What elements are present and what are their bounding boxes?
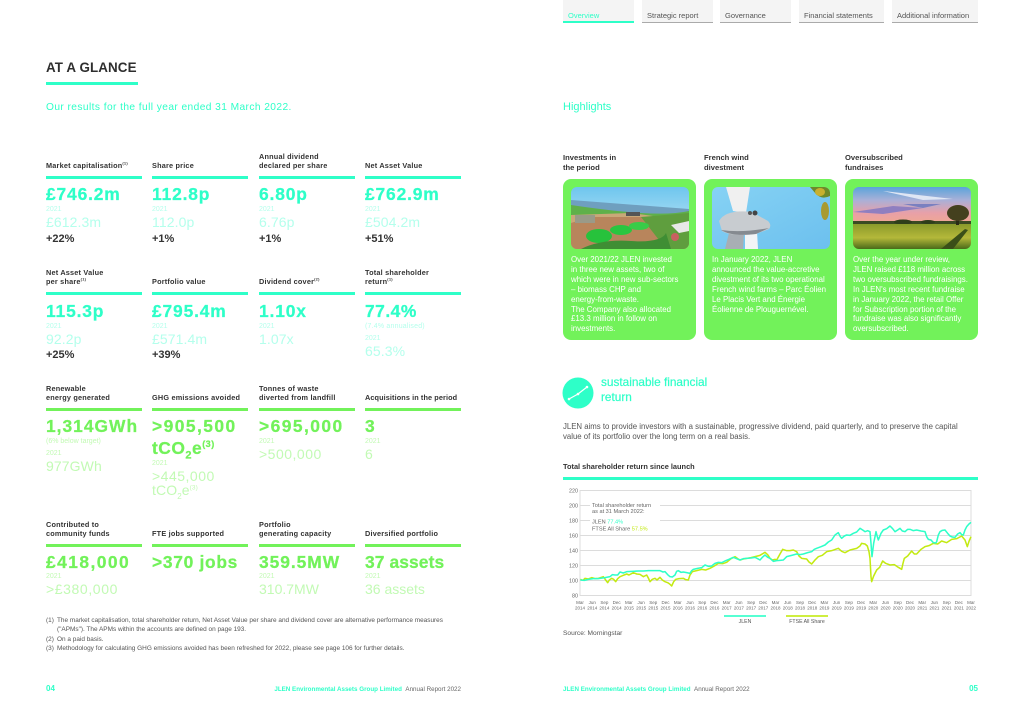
section heading: sustainable financial return: return xyxy=(601,390,632,404)
metric: market capitalisation: Market capitalisation(1) xyxy=(46,161,128,170)
metric: share price: 112.8p xyxy=(152,184,210,204)
metric: total shareholder return: 77.4% xyxy=(365,301,417,321)
card text: energy-from-waste. xyxy=(571,295,639,304)
tab: strategic report xyxy=(642,0,713,23)
footnotes xyxy=(46,616,443,652)
metric: net asset value per share: per share(1) xyxy=(46,277,86,286)
metric: GHG emissions avoided: tCO2e(3) xyxy=(152,438,215,461)
metric: acquisitions: 6 xyxy=(365,446,373,462)
x axis labels: Sep xyxy=(698,600,707,605)
x axis labels: Jun xyxy=(589,600,596,605)
metric: tonnes of waste diverted: >695,000 xyxy=(259,416,344,436)
metric: share price: +1% xyxy=(152,232,174,244)
metric: net asset value: +51% xyxy=(365,232,393,244)
x axis labels: 2017 xyxy=(746,606,757,610)
metric: community funds: £418,000 xyxy=(46,552,130,572)
metric: GHG emissions avoided: tCO2e(3) xyxy=(152,482,198,501)
x axis labels: 2016 xyxy=(685,606,696,610)
metric: diversified portfolio: Diversified portfolio xyxy=(365,529,438,538)
x axis labels: 2020 xyxy=(905,606,916,610)
metric: tonnes of waste diverted: >500,000 xyxy=(259,446,322,462)
metric: share price: 112.0p xyxy=(152,214,194,230)
metric: renewable energy generated: (6% below target) xyxy=(46,438,101,445)
panel: fundraises card xyxy=(845,179,978,340)
metric: portfolio value xyxy=(152,277,248,360)
x axis labels: 2015 xyxy=(660,606,671,610)
metric: total shareholder return: (7.4% annualised) xyxy=(365,323,425,330)
chart heading: Total shareholder return since launch xyxy=(563,462,695,471)
x axis labels: Mar xyxy=(674,600,682,605)
tab: additional information: Additional information xyxy=(897,11,969,20)
x axis labels: Dec xyxy=(857,600,866,605)
highlight heading: French wind: French wind xyxy=(704,153,749,162)
x axis labels: 2017 xyxy=(734,606,744,610)
metric: diversified portfolio: 2021 xyxy=(365,573,381,580)
metric: market capitalisation: £612.3m xyxy=(46,214,101,230)
card text: Over the year under review, xyxy=(853,255,950,264)
navigation tabs xyxy=(563,0,978,23)
metric: tonnes of waste diverted: diverted from landfill xyxy=(259,393,336,402)
x axis labels xyxy=(575,600,977,610)
x axis labels: Dec xyxy=(759,600,768,605)
metric: net asset value per share: 115.3p xyxy=(46,301,104,321)
metric: renewable energy generated: 977GWh xyxy=(46,458,102,474)
metric: GHG emissions avoided: GHG emissions avoided xyxy=(152,393,240,402)
photo: sunset field xyxy=(853,187,971,249)
footnotes: The market capitalisation, total shareholder return, Net Asset Value per share and dividend cover are alternative performance measures xyxy=(57,616,443,624)
x axis labels: Dec xyxy=(613,600,621,605)
x axis labels: Jun xyxy=(637,600,645,605)
metric: total shareholder return: 65.3% xyxy=(365,343,405,359)
x axis labels: Sep xyxy=(747,600,756,605)
x axis labels: 2019 xyxy=(856,606,867,610)
metric: diversified portfolio: 36 assets xyxy=(365,581,425,597)
metric: renewable energy generated: energy generated xyxy=(46,393,110,402)
metric: net asset value per share: 92.2p xyxy=(46,331,82,347)
x axis labels: 2021 xyxy=(929,606,940,610)
chart annotation: Total shareholder return xyxy=(592,503,651,509)
chart heading rule xyxy=(563,477,978,480)
card text: for Subscription portion of the xyxy=(853,305,956,314)
x axis labels: Dec xyxy=(808,600,817,605)
metric: market capitalisation xyxy=(46,161,142,244)
subtitle: Our results for the full year ended 31 March 2022. xyxy=(46,102,292,112)
x axis labels: 2016 xyxy=(709,606,720,610)
footnotes: (3) xyxy=(46,645,54,652)
metric: market capitalisation: +22% xyxy=(46,232,74,244)
highlight heading: fundraises xyxy=(845,153,903,172)
x axis labels: Sep xyxy=(845,600,853,605)
legend: FTSE All Share: FTSE All Share xyxy=(789,619,825,625)
y axis labels: 160 xyxy=(569,534,578,540)
metric: tonnes of waste diverted: Tonnes of waste xyxy=(259,384,319,393)
metric: FTE jobs: >370 jobs xyxy=(152,552,238,572)
footnotes: Methodology for calculating GHG emissions avoided has been refreshed for 2022, please see page 106 for further details. xyxy=(57,645,404,652)
y axis labels: 100 xyxy=(569,578,578,584)
metric: renewable energy generated: 2021 xyxy=(46,450,62,457)
x axis labels: Jun xyxy=(686,600,694,605)
metric: annual dividend: declared per share xyxy=(259,161,328,170)
x axis labels: Sep xyxy=(894,600,902,605)
tab: strategic report: Strategic report xyxy=(647,11,698,20)
x axis labels: 2021 xyxy=(954,606,964,610)
metric: share price xyxy=(152,161,248,244)
highlight heading: investments xyxy=(563,153,616,172)
card text: £13.3 million in follow on xyxy=(571,314,657,323)
metric: FTE jobs: FTE jobs supported xyxy=(152,529,224,538)
metric: annual dividend: 6.80p xyxy=(259,184,308,204)
metric: total shareholder return xyxy=(365,268,461,359)
x axis labels: 2022 xyxy=(966,606,977,610)
tab: financial statements xyxy=(799,0,884,23)
metric: total shareholder return: Total shareholder xyxy=(365,268,429,277)
x axis labels: 2017 xyxy=(758,606,769,610)
x axis labels: Sep xyxy=(649,600,658,605)
card text: In JLEN's most recent fundraise xyxy=(853,285,965,294)
footer right page number: 05 xyxy=(969,684,978,693)
highlights heading: Highlights xyxy=(563,100,611,112)
card text: Over 2021/22 JLEN invested xyxy=(571,255,672,264)
title: AT A GLANCE xyxy=(46,60,137,74)
metric: total shareholder return: return(1) xyxy=(365,277,393,286)
y axis labels xyxy=(569,488,578,600)
card text xyxy=(712,255,826,314)
metric: net asset value per share: Net Asset Value xyxy=(46,268,103,277)
metric: annual dividend: 2021 xyxy=(259,206,275,213)
footnotes: (2) xyxy=(46,636,54,642)
metric: share price: Share price xyxy=(152,161,194,170)
photo: wind turbine xyxy=(712,187,830,249)
x axis labels: 2021 xyxy=(917,606,928,610)
tab: governance xyxy=(720,0,791,23)
metric: net asset value: 2021 xyxy=(365,206,381,213)
highlight heading: fundraises: fundraises xyxy=(845,163,883,172)
chart annotation: JLEN 77.4% xyxy=(592,520,623,526)
tab: financial statements: Financial statements xyxy=(804,11,873,20)
card text: divestment of its two operational xyxy=(712,275,825,284)
metric: community funds xyxy=(46,520,142,597)
chart annotation: FTSE All Share 57.5% xyxy=(592,526,648,532)
metric: market capitalisation: 2021 xyxy=(46,206,62,213)
metric: generating capacity: 359.5MW xyxy=(259,552,340,572)
x axis labels: Mar xyxy=(723,600,731,605)
metric: dividend cover: 1.07x xyxy=(259,331,294,347)
metric: renewable energy generated xyxy=(46,384,142,474)
metric: net asset value xyxy=(365,161,461,244)
x axis labels: 2020 xyxy=(880,606,891,610)
footer left report name: JLEN Environmental Assets Group Limited Annual Report 2022 xyxy=(274,686,461,692)
y axis labels: 220 xyxy=(569,488,578,494)
section heading: sustainable financial return: sustainable financial xyxy=(601,375,707,389)
metric: tonnes of waste diverted xyxy=(259,384,355,462)
x axis labels: 2015 xyxy=(648,606,659,610)
card text: French wind farms – Parc Éolien xyxy=(712,285,826,294)
series: FTSE All Share xyxy=(580,522,971,586)
card text: JLEN raised £118 million across xyxy=(853,265,965,274)
x axis labels: 2014 xyxy=(612,606,622,610)
x axis labels: 2015 xyxy=(636,606,647,610)
metric: total shareholder return: 2021 xyxy=(365,335,381,342)
metric: community funds: community funds xyxy=(46,529,110,538)
paragraph: value of its portfolio over the long term on a real basis. xyxy=(563,432,750,441)
highlight heading: French wind: divestment xyxy=(704,163,744,172)
metric: share price: 2021 xyxy=(152,206,168,213)
metric: annual dividend: 6.76p xyxy=(259,214,295,230)
metric: generating capacity: Portfolio xyxy=(259,520,291,529)
metric: net asset value per share xyxy=(46,268,142,360)
legend: JLEN xyxy=(724,615,766,625)
panel: French wind card xyxy=(704,179,837,340)
photo: biomass plant xyxy=(571,187,689,249)
footnotes: On a paid basis. xyxy=(57,636,104,642)
card text: Éolienne de Plouguernével. xyxy=(712,305,809,314)
metric: dividend cover xyxy=(259,277,355,347)
metric: generating capacity: 310.7MW xyxy=(259,581,319,597)
x axis labels: 2021 xyxy=(942,606,952,610)
metric: acquisitions: Acquisitions in the period xyxy=(365,393,457,402)
tab: overview xyxy=(563,0,634,23)
metric: GHG emissions avoided: >905,500 xyxy=(152,416,237,436)
metric: acquisitions: 3 xyxy=(365,416,376,436)
metric: net asset value: £504.2m xyxy=(365,214,420,230)
footnotes: (1) xyxy=(46,616,54,624)
card text: two oversubscribed fundraisings. xyxy=(853,275,968,284)
metric: dividend cover: 1.10x xyxy=(259,301,307,321)
x axis labels: Dec xyxy=(906,600,915,605)
x axis labels: Dec xyxy=(955,600,964,605)
card text: The Company also allocated xyxy=(571,305,671,314)
metric: generating capacity: generating capacity xyxy=(259,529,331,538)
x axis labels: 2014 xyxy=(587,606,598,610)
card text: In January 2022, JLEN xyxy=(712,255,792,264)
x axis labels: Mar xyxy=(869,600,878,605)
metric: acquisitions xyxy=(365,393,461,462)
x axis labels: 2015 xyxy=(624,606,634,610)
highlight heading: French wind xyxy=(704,153,749,172)
x axis labels: Jun xyxy=(882,600,890,605)
x axis labels: Jun xyxy=(833,600,841,605)
x axis labels: Sep xyxy=(600,600,609,605)
x axis labels: 2018 xyxy=(795,606,806,610)
highlight heading: investments: Investments in xyxy=(563,153,616,162)
chart annotation xyxy=(592,503,651,532)
legend: JLEN: JLEN xyxy=(739,619,752,625)
x axis labels: Jun xyxy=(784,600,792,605)
x axis labels: Dec xyxy=(710,600,719,605)
x axis labels: Sep xyxy=(796,600,804,605)
metric: acquisitions: 2021 xyxy=(365,438,381,445)
card text: in three new assets, two of xyxy=(571,265,664,274)
metric: net asset value per share: 2021 xyxy=(46,323,62,330)
chart annotation: as at 31 March 2022: xyxy=(592,509,645,515)
y axis labels: 200 xyxy=(569,504,578,510)
metric: net asset value: Net Asset Value xyxy=(365,161,422,170)
x axis labels: Jun xyxy=(735,600,743,605)
y axis labels: 120 xyxy=(569,564,578,570)
x axis labels: 2018 xyxy=(807,606,818,610)
tab: additional information xyxy=(892,0,978,23)
metric: net asset value per share: +25% xyxy=(46,348,74,360)
x axis labels: 2018 xyxy=(783,606,793,610)
x axis labels: Mar xyxy=(625,600,633,605)
metric: annual dividend xyxy=(259,152,355,244)
metric: portfolio value: Portfolio value xyxy=(152,277,206,286)
metric: dividend cover: Dividend cover(2) xyxy=(259,277,320,286)
metric: renewable energy generated: Renewable xyxy=(46,384,86,393)
title underline xyxy=(46,82,138,85)
card text: which were in new sub-sectors xyxy=(571,275,678,284)
card text: – biomass CHP and xyxy=(571,285,641,294)
x axis labels: Mar xyxy=(772,600,780,605)
metric: market capitalisation: £746.2m xyxy=(46,184,121,204)
card text: fundraise was also significantly xyxy=(853,314,961,323)
x axis labels: Sep xyxy=(943,600,951,605)
card text: in January 2022, the retail Offer xyxy=(853,295,963,304)
panel: investments card xyxy=(563,179,696,340)
x axis labels: 2019 xyxy=(819,606,830,610)
metric: portfolio value: £795.4m xyxy=(152,301,227,321)
metric: tonnes of waste diverted: 2021 xyxy=(259,438,275,445)
y axis labels: 180 xyxy=(569,518,578,524)
metric: annual dividend: +1% xyxy=(259,232,281,244)
card text xyxy=(571,255,678,333)
legend: FTSE All Share xyxy=(786,615,828,625)
paragraph: JLEN aims to provide investors with a sustainable, progressive dividend, paid quarterly, and to preserve the capital xyxy=(563,422,958,431)
metric: FTE jobs xyxy=(152,529,248,572)
metric: dividend cover: 2021 xyxy=(259,323,275,330)
footer right report name: JLEN Environmental Assets Group Limited Annual Report 2022 xyxy=(563,686,750,692)
x axis labels: Mar xyxy=(918,600,927,605)
metric: generating capacity: 2021 xyxy=(259,573,275,580)
metric: portfolio value: 2021 xyxy=(152,323,168,330)
footnotes: ("APMs"). The APMs within the accounts are defined on page 193. xyxy=(57,626,246,632)
highlight heading: fundraises: Oversubscribed xyxy=(845,153,903,162)
icon: sustainable return circle xyxy=(562,378,594,408)
line chart: total shareholder return xyxy=(569,488,977,625)
x axis labels: 2016 xyxy=(697,606,708,610)
tab: overview: Overview xyxy=(568,11,599,20)
tab: governance: Governance xyxy=(725,11,766,20)
y axis labels: 80 xyxy=(572,594,578,600)
x axis labels: 2019 xyxy=(844,606,854,610)
metric: community funds: Contributed to xyxy=(46,520,99,529)
x axis labels: 2017 xyxy=(722,606,732,610)
card text: announced the value-accretive xyxy=(712,265,819,274)
footer left page number: 04 xyxy=(46,684,55,693)
x axis labels: Mar xyxy=(576,600,584,605)
metric: portfolio value: £571.4m xyxy=(152,331,207,347)
x axis labels: Dec xyxy=(661,600,670,605)
x axis labels: Mar xyxy=(821,600,829,605)
x axis labels: 2019 xyxy=(832,606,842,610)
highlight heading: investments: the period xyxy=(563,163,600,172)
x axis labels: 2016 xyxy=(673,606,683,610)
y axis labels: 140 xyxy=(569,548,578,554)
source note: Source: Morningstar xyxy=(563,630,622,636)
x axis labels: 2020 xyxy=(868,606,879,610)
metric: renewable energy generated: 1,314GWh xyxy=(46,416,138,436)
metric: community funds: 2021 xyxy=(46,573,62,580)
x axis labels: 2018 xyxy=(770,606,781,610)
metric: GHG emissions avoided xyxy=(152,393,248,501)
x axis labels: 2014 xyxy=(599,606,610,610)
section heading: sustainable financial return xyxy=(601,375,707,404)
card text: investments. xyxy=(571,324,615,333)
metric: generating capacity xyxy=(259,520,355,597)
x axis labels: Jun xyxy=(931,600,939,605)
metric: GHG emissions avoided: >445,000 xyxy=(152,468,215,484)
metric: diversified portfolio: 37 assets xyxy=(365,552,444,572)
metric: net asset value: £762.9m xyxy=(365,184,440,204)
metric: community funds: >£380,000 xyxy=(46,581,118,597)
card text: oversubscribed. xyxy=(853,324,909,333)
card text: Le Placis Vert and Énergie xyxy=(712,295,805,304)
series: JLEN xyxy=(580,522,971,580)
x axis labels: Mar xyxy=(967,600,975,605)
metric: portfolio value: +39% xyxy=(152,348,180,360)
metric: diversified portfolio xyxy=(365,529,461,597)
metric: annual dividend: Annual dividend xyxy=(259,152,319,161)
x axis labels: 2014 xyxy=(575,606,586,610)
card text xyxy=(853,255,968,333)
metric: GHG emissions avoided: 2021 xyxy=(152,460,168,467)
paragraph xyxy=(563,422,958,441)
x axis labels: 2020 xyxy=(893,606,903,610)
